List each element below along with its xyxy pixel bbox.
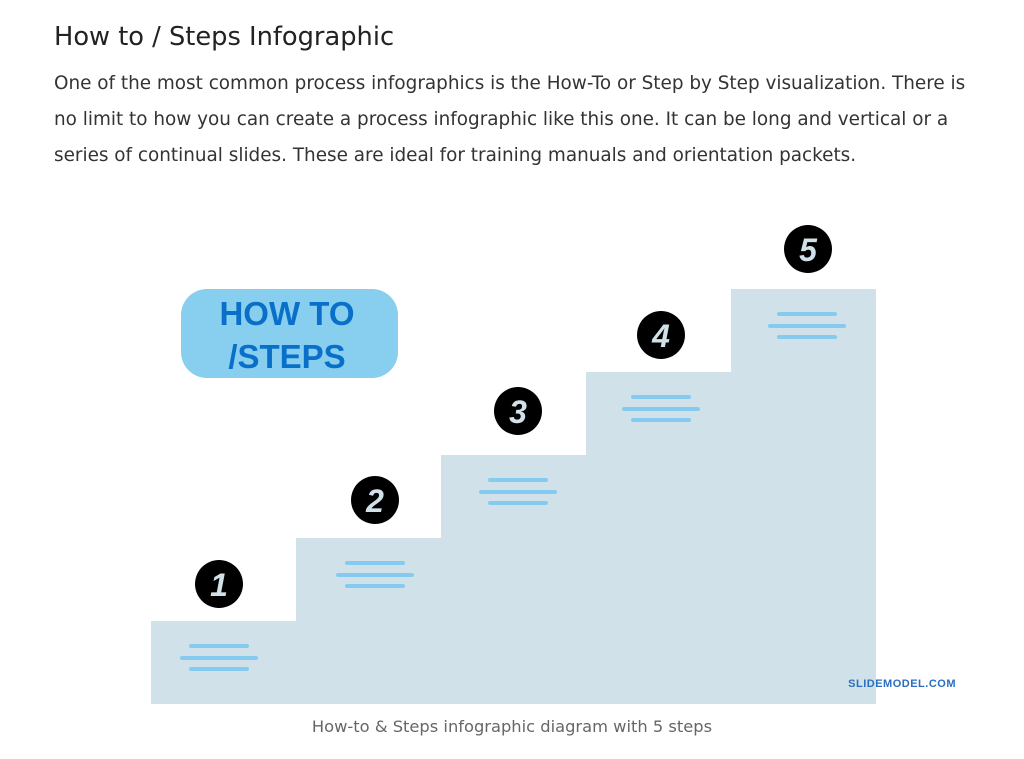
stairs: [151, 289, 876, 704]
description: [54, 73, 965, 166]
logo: SLIDEMODEL.COM: [848, 678, 956, 690]
title: How to / Steps Infographic: [54, 22, 394, 52]
number circles: 1: [210, 567, 228, 603]
how to badge: [181, 289, 398, 378]
how to badge: HOW TO: [219, 295, 355, 332]
how to badge: /STEPS: [228, 338, 346, 375]
number circles: 4: [651, 318, 670, 354]
number circles: 2: [365, 483, 384, 519]
caption: How-to & Steps infographic diagram with 5 steps: [312, 717, 712, 736]
description: One of the most common process infographics is the How-To or Step by Step visualization. There is: [54, 73, 965, 94]
description: no limit to how you can create a process infographic like this one. It can be long and vertical or a: [54, 109, 948, 130]
description: series of continual slides. These are ideal for training manuals and orientation packets.: [54, 145, 856, 166]
number circles: 5: [799, 232, 818, 268]
number circles: 3: [509, 394, 527, 430]
number circles: [195, 225, 832, 608]
step line groups: [182, 314, 844, 669]
